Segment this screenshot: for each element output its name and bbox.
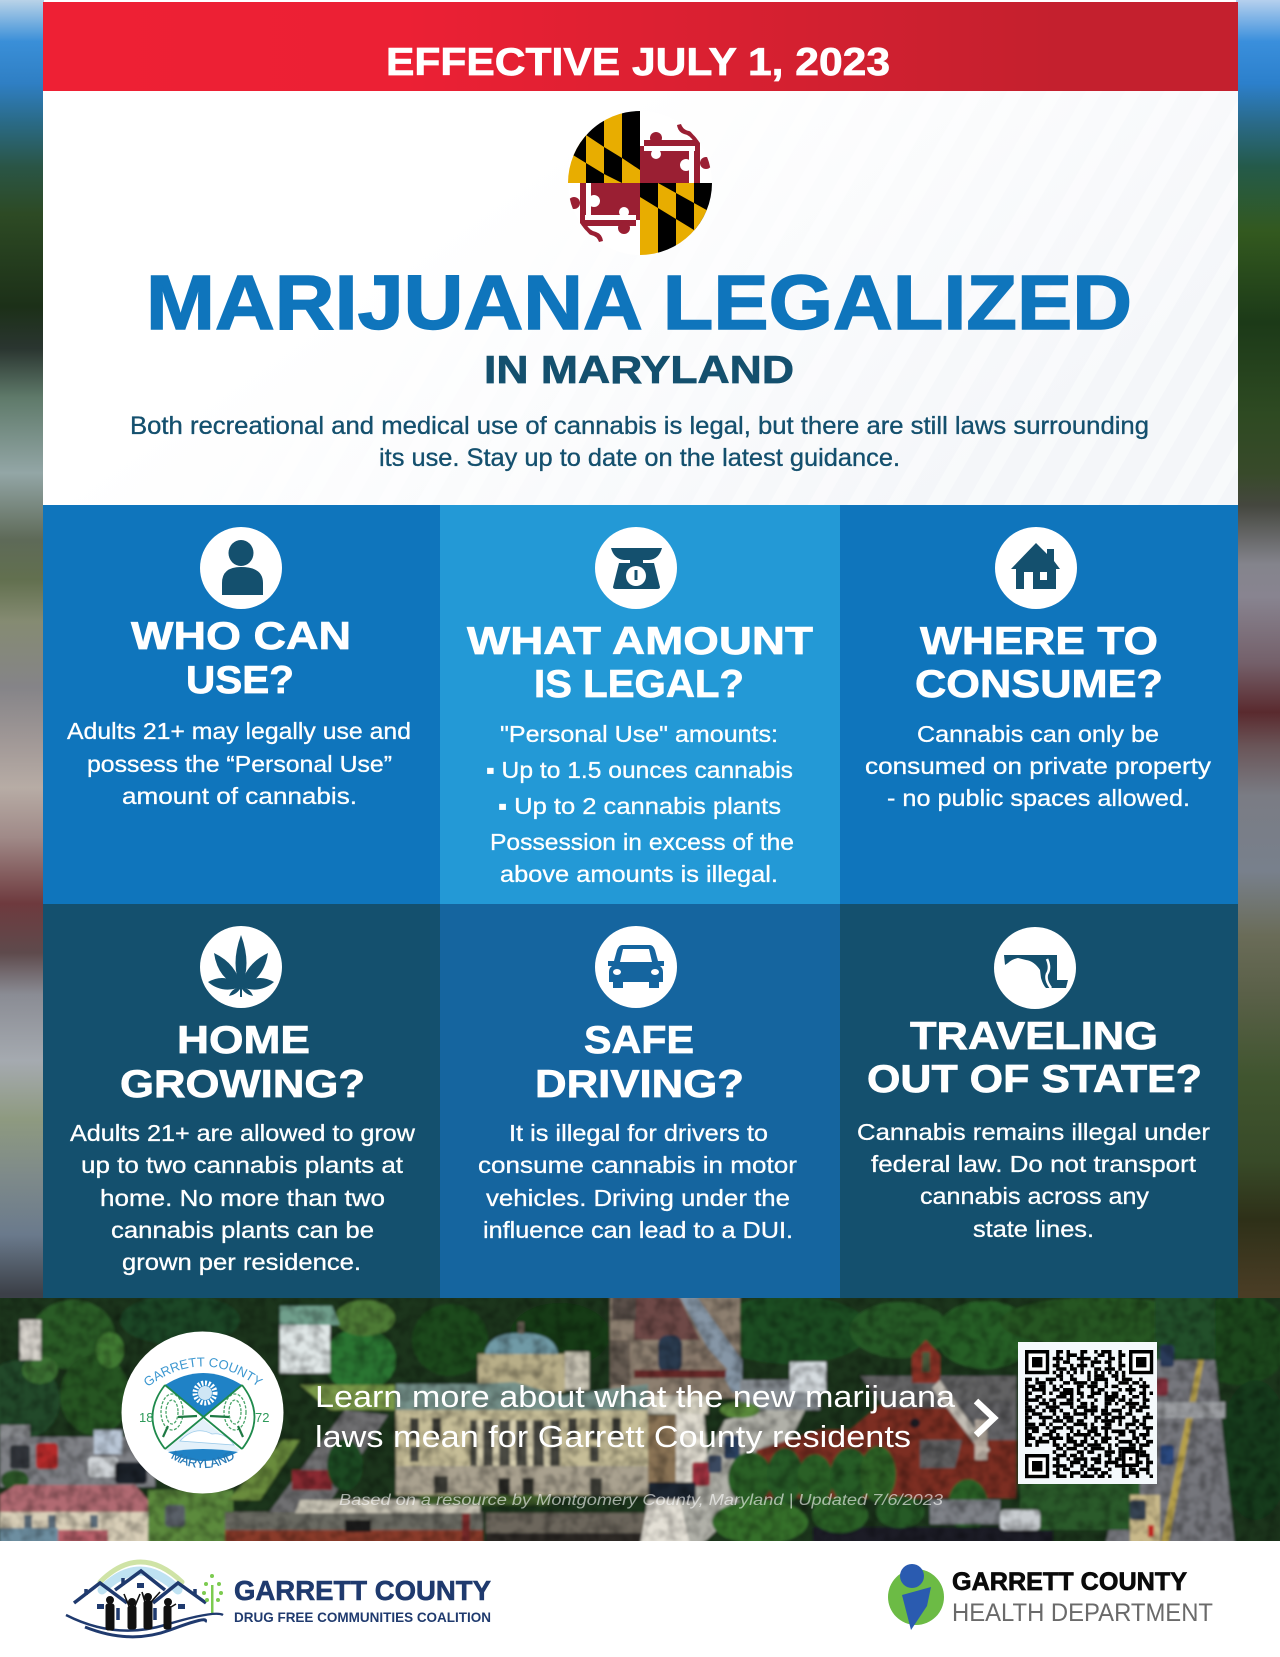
heading: home growing: GROWING? <box>120 1063 365 1106</box>
heading: where to consume: CONSUME? <box>915 663 1163 706</box>
brick church <box>756 1405 1016 1498</box>
icon: kitchen scale <box>595 527 677 609</box>
heading: safe driving: DRIVING? <box>535 1063 744 1106</box>
blurred photo background: left edge <box>0 0 44 1300</box>
panel: title area <box>43 91 1238 505</box>
heading: where to consume: WHERE TO <box>920 620 1158 663</box>
heading: traveling out of state <box>867 1015 1202 1101</box>
text: who can use: Adults 21+ may legally use and <box>67 718 411 744</box>
heading: safe driving <box>535 1019 744 1106</box>
text: what amount is legal <box>486 721 794 887</box>
heading: home growing: HOME <box>177 1019 310 1062</box>
text: where to consume <box>865 721 1212 811</box>
footer: white band <box>0 1541 1280 1657</box>
text: what amount is legal: Possession in excess of the <box>490 829 794 855</box>
text: traveling out of state: federal law. Do not transport <box>871 1151 1197 1177</box>
heading: what amount is legal <box>467 620 813 706</box>
text: what amount is legal: ▪ Up to 2 cannabis plants <box>498 793 781 819</box>
text: what amount is legal: "Personal Use" amounts: <box>500 721 778 747</box>
text: safe driving: It is illegal for drivers to <box>509 1120 768 1146</box>
text: what amount is legal: ▪ Up to 1.5 ounces cannabis <box>486 757 793 783</box>
text: who can use <box>67 718 411 809</box>
text: safe driving <box>478 1120 797 1243</box>
text: traveling out of state <box>857 1119 1210 1242</box>
banner: effective date: EFFECTIVE JULY 1, 2023 <box>386 41 890 84</box>
logo: blue head <box>900 1564 924 1588</box>
seal: foliage <box>161 1394 246 1430</box>
text: what amount is legal: above amounts is illegal. <box>500 861 778 887</box>
text: traveling out of state: Cannabis remains illegal under <box>857 1119 1210 1145</box>
logo: green circle <box>888 1569 944 1625</box>
seal: sun <box>195 1383 215 1403</box>
heading: safe driving: SAFE <box>584 1019 694 1062</box>
text: home growing: cannabis plants can be <box>111 1217 374 1243</box>
heading: who can use: USE? <box>186 659 294 702</box>
icon: Maryland map <box>994 927 1076 1009</box>
arrow: chevron to QR <box>976 1401 994 1435</box>
logo: waves <box>66 1614 223 1637</box>
logo: rainbow arcs <box>100 1562 182 1590</box>
text: where to consume: Cannabis can only be <box>917 721 1159 747</box>
seal: shield outline <box>152 1385 254 1449</box>
heading: traveling out of state: TRAVELING <box>910 1015 1158 1058</box>
panel: where to consume <box>840 505 1238 905</box>
panel: who can use <box>43 505 440 905</box>
call to action text: Learn more about what the new marijuana <box>315 1379 956 1414</box>
text: where to consume: - no public spaces allowed. <box>887 785 1190 811</box>
heading: traveling out of state: OUT OF STATE? <box>867 1058 1202 1101</box>
photo: aerial view of Oakland town <box>0 1298 1280 1541</box>
seal: blue sky sector <box>165 1373 242 1417</box>
row of trees <box>728 1452 772 1504</box>
text: traveling out of state: cannabis across any <box>920 1183 1150 1209</box>
lawn and road by seal <box>148 1490 233 1546</box>
panel: safe driving <box>440 904 840 1298</box>
mid gray buildings <box>740 1380 820 1410</box>
subtitle: IN MARYLAND <box>484 349 794 392</box>
church <box>610 1290 740 1398</box>
left parking lot <box>0 1425 30 1439</box>
seal: mountains and water <box>166 1419 240 1461</box>
intro text <box>130 412 1149 472</box>
text: safe driving: consume cannabis in motor <box>478 1152 797 1178</box>
text: home growing: grown per residence. <box>122 1249 361 1275</box>
call to action text: laws mean for Garrett County residents <box>315 1419 911 1454</box>
heading: who can use: WHO CAN <box>131 615 351 658</box>
logo: coalition name: GARRETT COUNTY <box>234 1575 491 1606</box>
pink roof building <box>0 1485 148 1512</box>
intro text: its use. Stay up to date on the latest guidance. <box>379 444 900 472</box>
heading: where to consume <box>915 620 1163 706</box>
icon: cannabis leaf <box>200 926 282 1008</box>
heading: what amount is legal: WHAT AMOUNT <box>467 620 813 663</box>
seal: Garrett County <box>122 1332 284 1494</box>
logo: blue body <box>902 1587 931 1630</box>
seal: county name: GARRETT COUNTY <box>144 1358 264 1386</box>
text: safe driving: influence can lead to a DUI. <box>483 1217 793 1243</box>
panel: traveling out of state <box>840 904 1238 1298</box>
logo: department name: GARRETT COUNTY <box>952 1568 1187 1596</box>
text: who can use: possess the “Personal Use” <box>87 751 392 777</box>
panel: what amount is legal <box>440 505 840 905</box>
banner: effective date <box>43 2 1238 91</box>
call to action text <box>315 1379 956 1454</box>
logo: department tagline: HEALTH DEPARTMENT <box>952 1599 1213 1627</box>
source note: Based on a resource by Montgomery County, Maryland | Updated 7/6/2023 <box>339 1492 943 1509</box>
logo: people silhouettes <box>106 1592 176 1630</box>
icon: house <box>995 527 1077 609</box>
text: home growing: up to two cannabis plants at <box>81 1152 404 1178</box>
right side street <box>1105 1360 1235 1546</box>
heading: what amount is legal: IS LEGAL? <box>534 663 744 706</box>
courthouse <box>485 1333 558 1354</box>
icon: Maryland flag circle <box>568 111 712 255</box>
trees <box>31 1300 115 1370</box>
seal: state name: MARYLAND <box>171 1450 234 1468</box>
heading: who can use <box>131 615 351 702</box>
text: home growing: home. No more than two <box>100 1185 385 1211</box>
left house <box>20 1320 41 1360</box>
title: MARIJUANA LEGALIZED <box>146 260 1132 346</box>
heading: home growing <box>120 1019 365 1106</box>
text: home growing <box>70 1120 415 1275</box>
panel: home growing <box>43 904 440 1298</box>
seal: branches <box>163 1416 243 1437</box>
icon: car <box>595 926 677 1008</box>
blurred photo background: right edge <box>1236 0 1280 1300</box>
icon: person <box>200 527 282 609</box>
seal: year right: 72 <box>255 1410 269 1425</box>
seal: year left: 18 <box>139 1410 153 1425</box>
logo: tree <box>202 1574 223 1614</box>
logo: windows <box>97 1583 185 1609</box>
pale green house <box>280 1306 340 1325</box>
text: home growing: Adults 21+ are allowed to grow <box>70 1120 415 1146</box>
logo: coalition tagline: DRUG FREE COMMUNITIES COALITION <box>234 1609 491 1625</box>
logo: Garrett County Drug Free Communities Coalition <box>66 1562 491 1637</box>
QR finder patterns <box>1025 1350 1153 1478</box>
text: where to consume: consumed on private property <box>865 753 1212 779</box>
text: traveling out of state: state lines. <box>973 1216 1094 1242</box>
text: safe driving: vehicles. Driving under the <box>486 1185 790 1211</box>
QR code <box>1018 1342 1157 1484</box>
text: who can use: amount of cannabis. <box>122 783 357 809</box>
right of courthouse <box>648 1415 676 1485</box>
logo: house roofs <box>74 1571 206 1620</box>
intro text: Both recreational and medical use of cannabis is legal, but there are still laws surrounding <box>130 412 1149 440</box>
logo: Garrett County Health Department <box>888 1564 1213 1630</box>
bottom buildings <box>225 1512 483 1534</box>
